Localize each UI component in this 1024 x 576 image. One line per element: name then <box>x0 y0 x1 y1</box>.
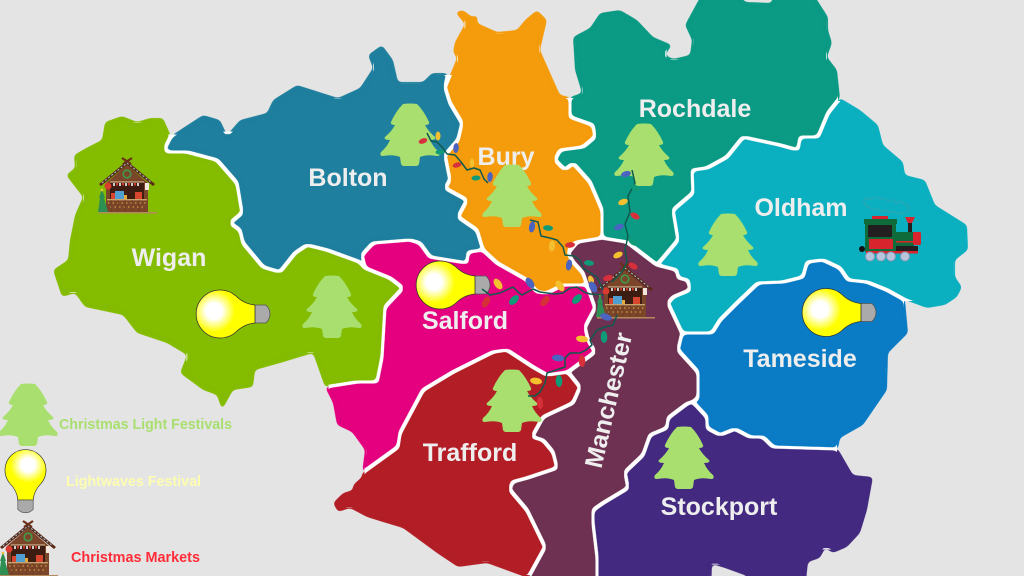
label: Oldham: Oldham <box>754 194 848 222</box>
region: Stockport <box>593 402 873 576</box>
region: Salford <box>325 240 595 473</box>
label: Trafford: Trafford <box>423 439 517 467</box>
region: Bury <box>445 10 602 293</box>
legend text: Lightwaves Festival: Lightwaves Festival <box>66 473 201 490</box>
legend icon: tree <box>0 384 58 446</box>
icon: lightbulb Wigan <box>196 290 270 338</box>
string lights: Bolton to Bury <box>418 132 493 183</box>
string lights: Salford to Manchester <box>480 276 603 309</box>
icon: tree Wigan <box>302 276 362 338</box>
region: Wigan <box>53 116 403 410</box>
icon: tree Stockport <box>654 426 714 489</box>
region: Rochdale <box>555 0 840 265</box>
region: Bolton <box>165 45 483 272</box>
legend text: Christmas Light Festivals: Christmas Light Festivals <box>59 416 232 433</box>
region labels <box>132 95 857 521</box>
legend icon: market stall <box>0 521 58 576</box>
legend text: Christmas Markets: Christmas Markets <box>71 549 200 566</box>
legend icon: lightbulb <box>5 450 46 513</box>
icon: tree Rochdale <box>614 124 674 186</box>
label: Bolton: Bolton <box>308 164 388 192</box>
icon: tree Bolton <box>380 104 440 166</box>
icon: tree Trafford <box>482 370 542 432</box>
icon: tree Bury <box>482 164 542 227</box>
region: Tameside <box>678 260 908 449</box>
icon: market stall Wigan <box>98 158 157 214</box>
label: Wigan: Wigan <box>132 244 206 272</box>
label: Salford: Salford <box>422 307 508 335</box>
icon: lightbulb Salford <box>416 261 490 309</box>
region: Trafford <box>333 350 580 576</box>
string lights: Bury to Manchester <box>528 220 603 290</box>
icon: steam train <box>859 198 921 261</box>
legend <box>0 384 232 576</box>
label: Stockport: Stockport <box>661 493 778 521</box>
region: Oldham <box>657 98 968 333</box>
label: Tameside: Tameside <box>743 345 857 373</box>
icon: tree Oldham <box>698 214 758 276</box>
label: Bury: Bury <box>478 143 535 171</box>
icon: lightbulb Tameside <box>802 288 876 336</box>
label: Manchester: Manchester <box>580 330 638 471</box>
string lights: Manchester to Trafford <box>528 312 617 409</box>
label: Rochdale: Rochdale <box>639 95 751 123</box>
icon: market stall Manchester <box>596 263 655 318</box>
string lights: Rochdale to Manchester <box>602 170 641 282</box>
region: Manchester <box>510 238 698 576</box>
